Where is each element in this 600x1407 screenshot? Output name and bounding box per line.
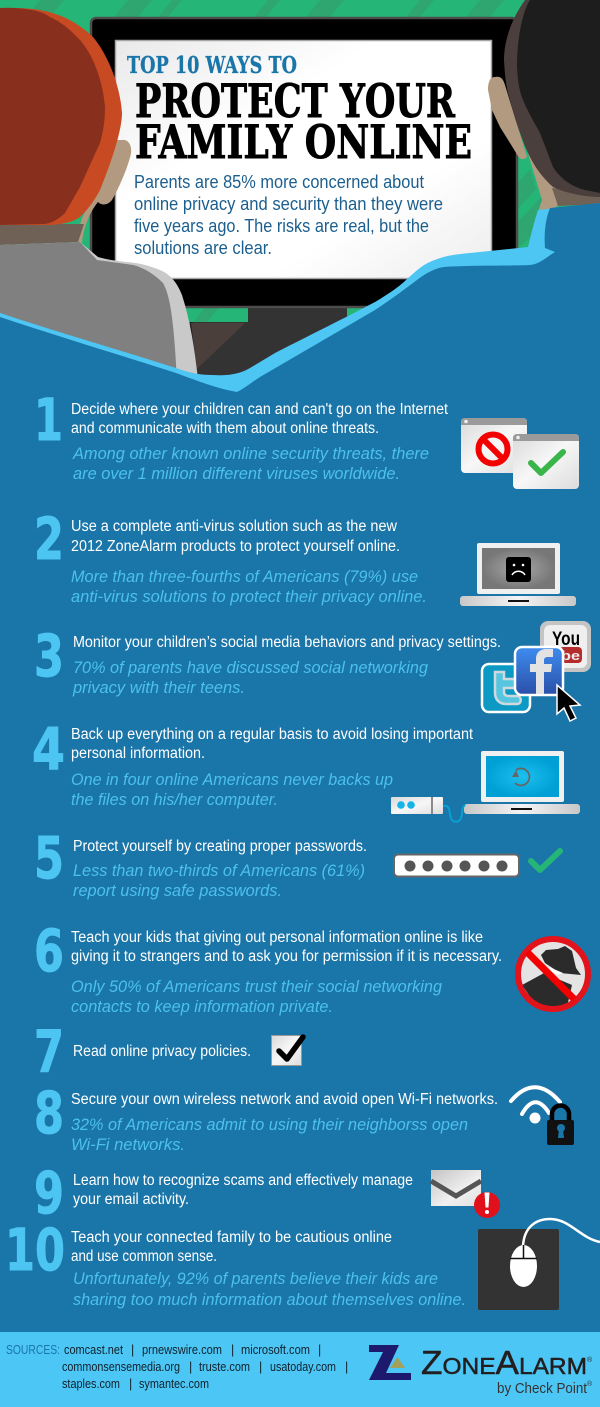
step 8 text: Secure your own wireless network and avoid open Wi-Fi networks. [71,1091,498,1108]
step 2 [34,505,576,606]
logo: ZoneAlarm: ® [587,1356,593,1364]
twitter badge [482,664,530,712]
step 10 text: Teach your connected family to be cautious online [71,1229,392,1246]
step 5 text: Less than two-thirds of Americans (61%) [73,861,365,880]
step 4 text [71,726,474,809]
intro paragraph [134,172,443,258]
step 8 text: 32% of Americans admit to using their neighborss open [71,1115,468,1134]
number 8: 8 [34,1079,64,1147]
step 1 text: are over 1 million different viruses worldwide. [73,464,400,483]
cursor [557,685,580,721]
intro paragraph: solutions are clear. [134,238,272,258]
step 10 [5,1216,600,1310]
step 2 text [71,518,427,606]
sources list: comcast.net [64,1343,123,1357]
step 4 text: One in four online Americans never backs up [71,770,393,789]
sources list: microsoft.com [241,1343,310,1357]
youtube badge [540,621,591,672]
step 4 [32,715,580,822]
step 3 text: 70% of parents have discussed social networking [73,658,429,677]
step 6 [36,928,591,1016]
step 3 text [72,634,501,697]
intro paragraph: online privacy and security than they were [134,194,443,214]
sources list: commonsensemedia.org [62,1360,180,1374]
number 9: 9 [34,1159,64,1227]
intro paragraph: five years ago. The risks are real, but the [134,216,429,236]
sources list: | [345,1360,348,1374]
icon: wifi lock [511,1087,574,1145]
number 3: 3 [34,622,64,690]
icon: no hacker [518,939,588,1009]
number 4: 4 [32,715,65,783]
sources list: usatoday.com [270,1360,336,1374]
number 6: 6 [34,917,64,985]
icon: password field [394,854,519,876]
step 7 [34,1018,303,1086]
step 2 text: 2012 ZoneAlarm products to protect yourself online. [71,538,400,555]
step 2 text: Use a complete anti-virus solution such as the new [71,518,398,535]
step 2 text: More than three-fourths of Americans (79%) use [71,567,418,586]
step 1 text: Decide where your children can and can't go on the Internet [71,401,449,418]
step 1 [34,386,579,489]
number 2: 2 [34,505,64,573]
icon: green check [531,851,560,870]
step 5 text [73,838,367,900]
sources list [6,1342,348,1391]
title: family online: FAMILY ONLINE [135,115,472,169]
icon: browser windows [461,418,579,489]
icon: laptop backup with drive [391,751,580,822]
step 1 text: and communicate with them about online threats. [71,420,379,437]
green wall with stripes [0,0,600,322]
sources list: | [131,1343,134,1357]
sources list: | [231,1343,234,1357]
step 1 text [71,401,449,483]
step 10 text [71,1229,466,1309]
step 3 text: privacy with their teens. [72,678,245,697]
step 8 text [71,1091,498,1154]
title: protect your: PROTECT YOUR [135,74,456,128]
logo: ZoneAlarm [369,1344,593,1397]
sources list: symantec.com [139,1377,209,1391]
intro paragraph: Parents are 85% more concerned about [134,172,424,192]
youtube badge: You [552,629,580,650]
step 3 [34,621,591,721]
step 7 text: Read online privacy policies. [73,1043,251,1060]
step 10 text: sharing too much information about themselves online. [73,1290,466,1309]
step 10 text: Unfortunately, 92% of parents believe their kids are [73,1269,438,1288]
parent right: head and neck [488,0,600,212]
icon: email alert [431,1170,500,1218]
sources list: | [189,1360,192,1374]
step 8 [34,1079,574,1154]
monitor stand [190,308,347,397]
step 6 text: giving it to strangers and to ask you for permission if it is necessary. [71,948,502,965]
step 9 text [73,1172,413,1208]
step 2 text: anti-virus solutions to protect their privacy online. [71,587,427,606]
parent left: head and shoulder [0,8,198,380]
sources list: staples.com [62,1377,120,1391]
sources list: prnewswire.com [142,1343,222,1357]
screen panel [116,40,492,278]
youtube badge: be [561,648,580,663]
step 4 text: the files on his/her computer. [71,790,278,809]
sources list: SOURCES: [6,1342,60,1357]
facebook badge [515,647,563,695]
number 5: 5 [34,824,64,892]
number 10: 10 [5,1216,65,1284]
step 6 text [71,929,502,1016]
sources list: truste.com [199,1360,250,1374]
step 3 text: Monitor your children’s social media behaviors and privacy settings. [73,634,501,651]
sources list: | [259,1360,262,1374]
step 4 text: personal information. [71,745,205,762]
step 10 text: and use common sense. [71,1248,217,1265]
step 9 [34,1159,500,1227]
icon: laptop sad face [460,543,576,606]
logo: ZoneAlarm: by Check Point [497,1380,588,1397]
number 1: 1 [34,386,63,454]
step 5 text: report using safe passwords. [73,881,282,900]
monitor frame [91,18,517,307]
logo: ZoneAlarm: ® [587,1380,593,1388]
step 9 text: Learn how to recognize scams and effectively manage [73,1172,413,1189]
sources list: | [318,1343,321,1357]
step 5 [34,824,560,900]
icon: social media badges and cursor [482,621,591,721]
step 1 text: Among other known online security threats, there [72,444,429,463]
step 6 text: Teach your kids that giving out personal information online is like [71,929,483,946]
step 6 text: Only 50% of Americans trust their social networking [71,977,443,996]
icon: checkbox [272,1036,303,1066]
number 7: 7 [34,1018,64,1086]
footer band [0,1332,600,1407]
sources list: | [129,1377,132,1391]
step 6 text: contacts to keep information private. [71,997,333,1016]
icon: mouse on pad [478,1219,600,1310]
step 4 text: Back up everything on a regular basis to avoid losing important [71,726,474,743]
step 8 text: Wi-Fi networks. [71,1135,185,1154]
title: top 10 ways to: TOP 10 WAYS TO [127,52,297,79]
logo: ZoneAlarm: ZoneAlarm [421,1344,587,1381]
step 5 text: Protect yourself by creating proper passwords. [73,838,367,855]
step 9 text: your email activity. [73,1191,189,1208]
